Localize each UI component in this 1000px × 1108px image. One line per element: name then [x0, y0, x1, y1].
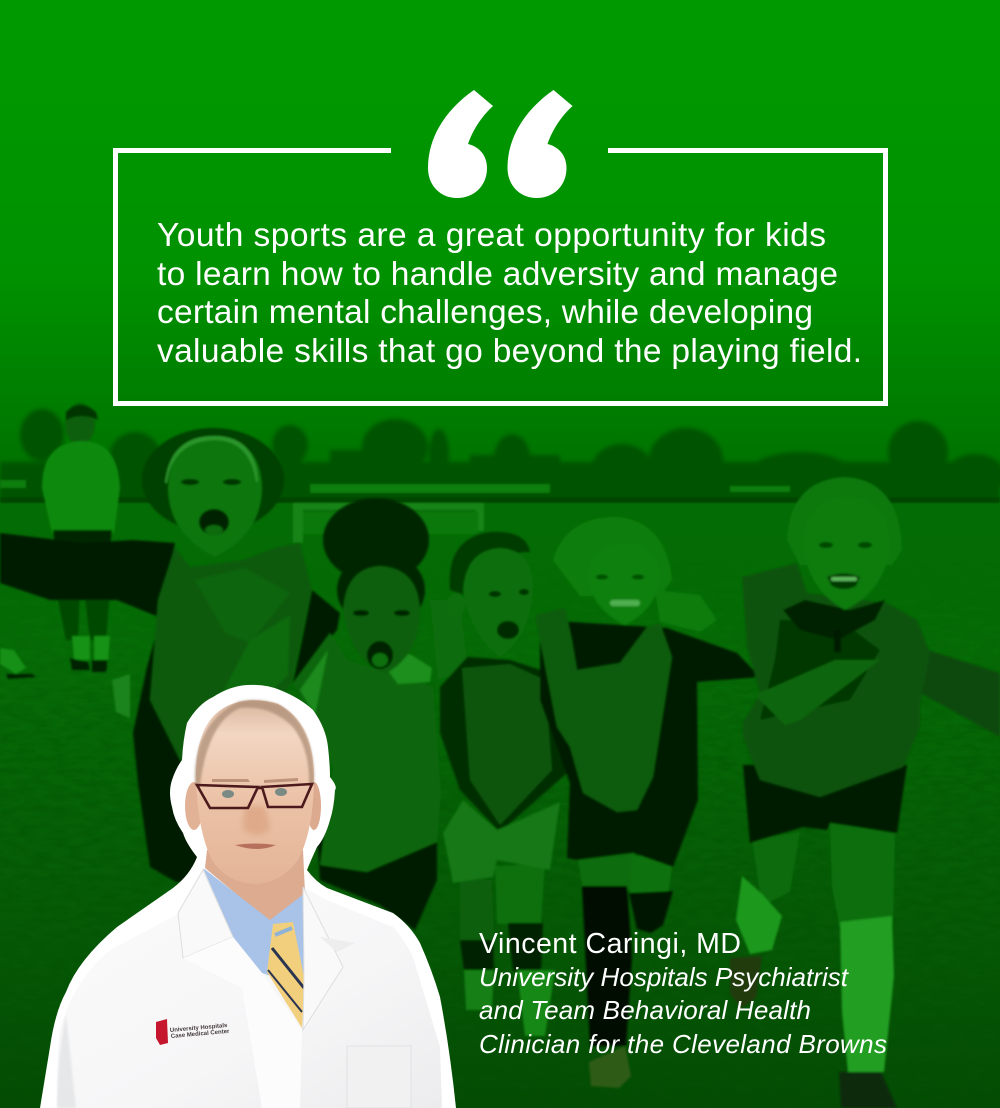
shorts — [743, 765, 907, 843]
quote text — [157, 217, 862, 370]
arm — [430, 600, 468, 680]
name: Vincent Caringi, MD — [479, 928, 741, 960]
shirt — [293, 633, 441, 872]
role: and Team Behavioral Health — [479, 995, 811, 1025]
role: Clinician for the Cleveland Browns — [479, 1029, 887, 1059]
figure: child 1, laughing girl — [0, 428, 340, 882]
socks — [736, 876, 782, 954]
background: grass field — [0, 497, 1000, 1108]
lab coat — [57, 870, 442, 1108]
bib — [150, 543, 312, 780]
jacket — [742, 563, 930, 797]
logo: Case Medical Center — [171, 1029, 230, 1040]
hair — [450, 532, 530, 595]
eyes — [222, 790, 234, 798]
right arm — [293, 590, 340, 683]
shirt — [440, 657, 567, 832]
face — [587, 543, 660, 625]
blue shirt collar — [203, 868, 306, 985]
face — [343, 566, 420, 674]
figure: child 3, young boy — [430, 532, 567, 1036]
collar — [783, 600, 885, 640]
black arm and body side — [0, 533, 215, 882]
figures: all children — [0, 403, 1000, 1108]
attribution — [479, 928, 887, 1059]
hair — [195, 700, 314, 785]
eyes — [181, 479, 199, 485]
quote text: certain mental challenges, while developing — [157, 294, 813, 331]
face — [463, 548, 533, 657]
quote text: Youth sports are a great opportunity for kids — [157, 217, 826, 254]
light collar — [380, 654, 432, 684]
nose — [243, 806, 269, 835]
ear — [447, 593, 465, 617]
figure: child 4, blonde girl — [535, 517, 762, 1088]
mouth — [235, 844, 276, 849]
logo — [156, 1019, 230, 1045]
mouth — [199, 509, 229, 535]
boot — [730, 956, 762, 1008]
shorts — [443, 800, 560, 883]
quote frame — [116, 150, 886, 404]
shorts — [317, 820, 437, 930]
legs — [577, 850, 635, 890]
figure: coach in background — [0, 403, 120, 679]
portrait: doctor with white cutout outline — [40, 685, 456, 1108]
socks — [582, 886, 632, 1046]
hair — [787, 477, 902, 565]
ears — [185, 782, 203, 830]
background: green gradient sky — [0, 0, 1000, 500]
arm — [920, 650, 1000, 737]
background: distant buildings highlights — [0, 480, 790, 493]
leg highlight — [112, 674, 130, 718]
white cutout border — [40, 685, 456, 1108]
role: University Hospitals Psychiatrist — [479, 962, 850, 992]
quote text: to learn how to handle adversity and manage — [157, 256, 838, 293]
tie — [267, 922, 305, 1028]
background: tree line — [0, 409, 1000, 500]
hair — [553, 517, 672, 596]
hair cloud — [142, 428, 284, 532]
role — [479, 962, 887, 1059]
glasses — [197, 784, 312, 808]
background: goal frame — [293, 503, 484, 543]
ponytail — [655, 590, 717, 632]
face — [168, 438, 262, 557]
figure: child 2, curly hair — [293, 498, 441, 930]
black body and shorts — [540, 620, 760, 867]
legs — [752, 832, 800, 906]
figure: child 5, smiling girl — [736, 477, 1000, 1108]
coat lapels — [178, 870, 355, 1108]
face — [803, 497, 890, 610]
logo: University Hospitals — [170, 1023, 228, 1034]
quote text: valuable skills that go beyond the playing field. — [157, 333, 862, 370]
icon: opening quotation mark — [428, 90, 572, 198]
coat pocket — [347, 1046, 411, 1108]
eyebrows — [212, 778, 298, 783]
hair — [323, 498, 429, 582]
legs — [460, 880, 494, 942]
bib — [535, 608, 672, 812]
neck — [205, 850, 305, 922]
head — [196, 700, 314, 884]
